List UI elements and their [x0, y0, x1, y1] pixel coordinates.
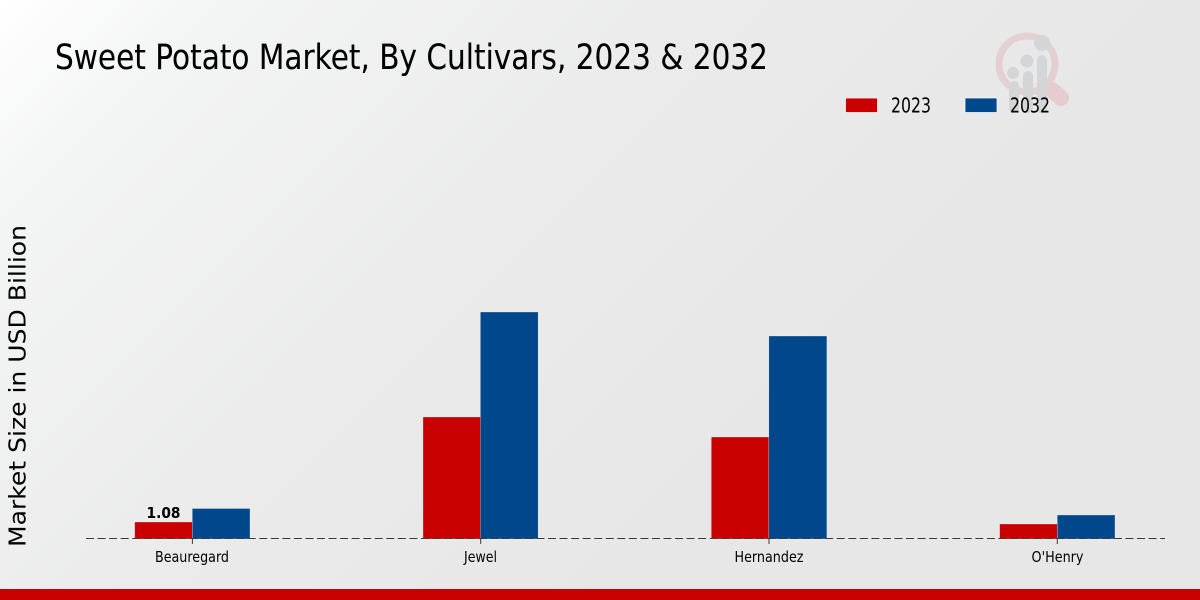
category labels: Jewel: [463, 548, 497, 566]
category labels: [155, 548, 1084, 566]
bars: Hernandez: [711, 336, 827, 539]
footer bar: [0, 589, 1200, 600]
legend: 2032: 2032: [1010, 94, 1050, 118]
bars: Beauregard: [135, 508, 250, 539]
title: Sweet Potato Market, By Cultivars, 2023 & 2032: [55, 38, 768, 78]
category labels: Beauregard: [155, 548, 229, 566]
bars: O'Henry: [1000, 515, 1115, 539]
watermark logo: [999, 35, 1061, 113]
legend: 2023: [846, 94, 931, 118]
y axis label: Market Size in USD Billion: [4, 225, 32, 547]
legend: 2023: 2023: [891, 94, 931, 118]
category labels: O'Henry: [1032, 548, 1084, 566]
value label: 1.08: [146, 504, 180, 522]
category labels: Hernandez: [734, 548, 804, 566]
x axis: [86, 538, 1165, 544]
bars: Jewel: [423, 312, 538, 539]
legend: [846, 94, 1050, 118]
legend: 2032: [965, 94, 1050, 118]
bar chart: [86, 312, 1165, 566]
